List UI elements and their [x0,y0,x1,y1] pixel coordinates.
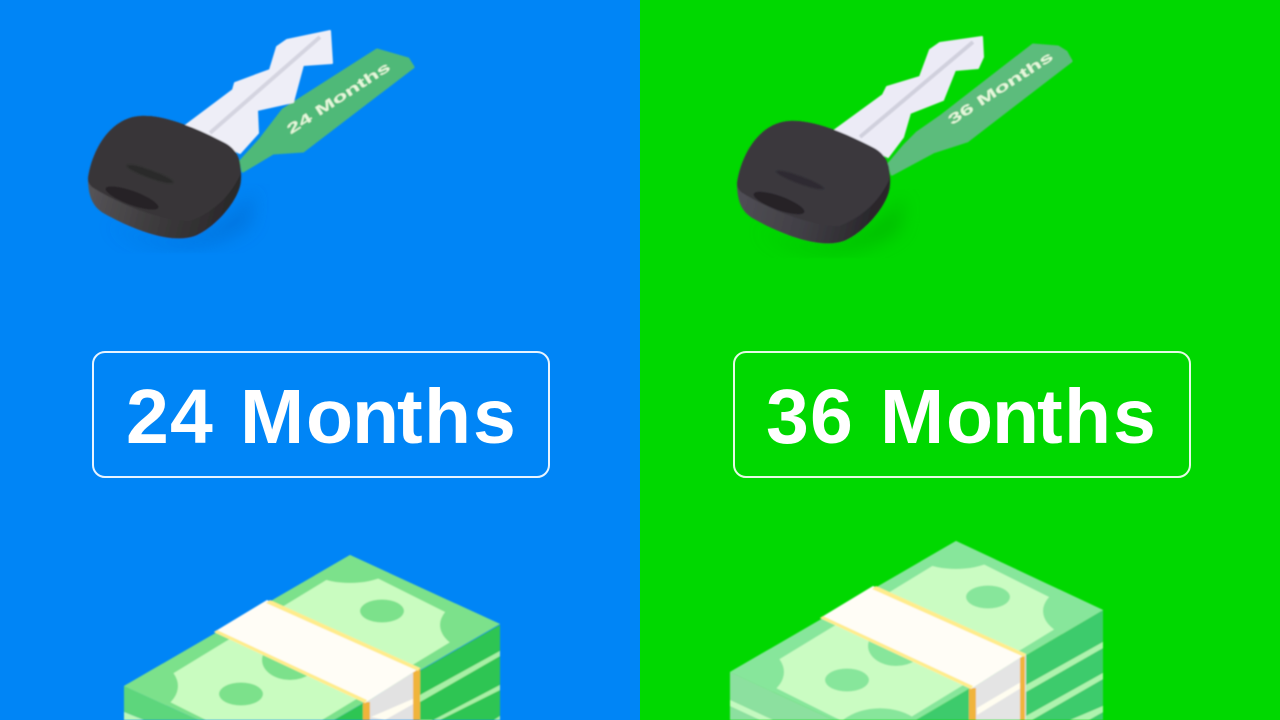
icon: cash stack 24 months [123,554,501,720]
paper band 24 months [214,600,420,720]
panel: 36 months [640,0,1280,720]
key blade 36 months [835,37,983,157]
key tag 36 months [889,45,1071,174]
key head 24 months [88,116,241,239]
icon: cash stack 36 months [729,540,1104,720]
label box 24 months: 24 Months [126,374,516,460]
label box 24 months [93,352,549,477]
key tag 24 months [241,50,413,171]
label box 36 months: 36 Months [766,374,1156,460]
paper band 36 months [820,586,1026,720]
icon: car key 24 months [88,31,413,247]
key blade 24 months [185,31,332,153]
key tag 36 months: 36 Months [945,48,1056,128]
key head 36 months [737,121,890,244]
panel: 24 months [87,29,550,720]
key tag 24 months: 24 Months [284,58,393,137]
label box 36 months [734,352,1190,477]
icon: car key 36 months [737,37,1071,252]
